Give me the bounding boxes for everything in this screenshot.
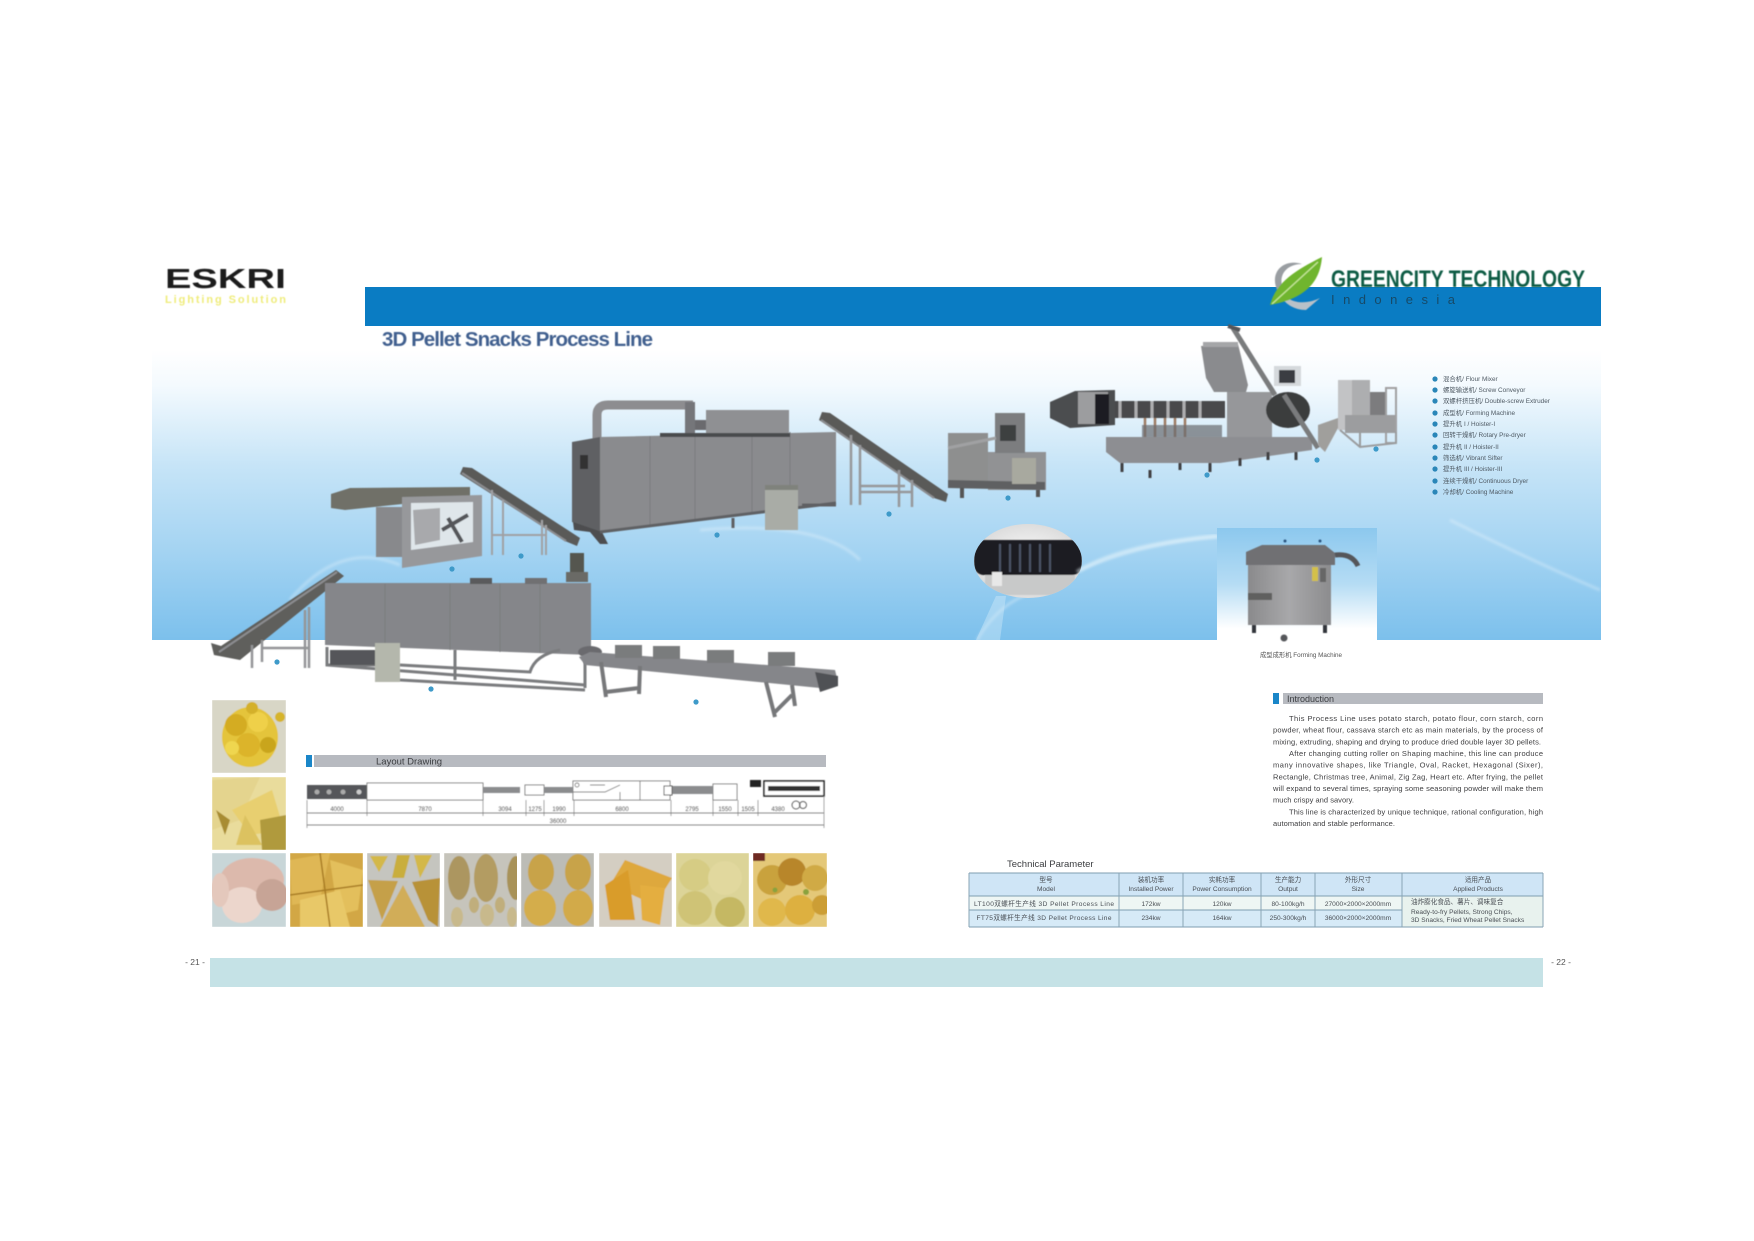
layout drawing: 7870 bbox=[418, 807, 432, 813]
logo: Greencity Technology bbox=[1270, 257, 1585, 310]
legend: machine list: 提升机 III / Hoister-III bbox=[1443, 464, 1503, 473]
photo: pale ridged snacks bbox=[676, 853, 749, 927]
legend: machine list: 螺旋输送机/ Screw Conveyor bbox=[1443, 385, 1526, 394]
table: technical parameters: 250-300kg/h bbox=[1270, 915, 1307, 922]
machine: large rotary pre-dryer bbox=[572, 402, 836, 544]
conveyor: hoister to pre-dryer bbox=[460, 467, 580, 555]
footer bar bbox=[210, 958, 1543, 987]
heading bar: layout drawing: Layout Drawing bbox=[376, 756, 442, 768]
header blue bar bbox=[365, 287, 1601, 326]
text block: introduction: This line is characterized by unique technique, rational configuration, high bbox=[1289, 807, 1543, 816]
table: technical parameters: 172kw bbox=[1141, 901, 1161, 908]
machine: continuous dryer bbox=[211, 553, 602, 690]
table: technical parameters: 36000×2000×2000mm bbox=[1325, 915, 1392, 922]
text block: introduction: powder, wheat flour, cassava starch etc as main materials, by the process of bbox=[1273, 726, 1544, 735]
machine: forming machine on line bbox=[948, 413, 1046, 498]
photo: round snacks bbox=[521, 853, 594, 927]
legend: machine list: 混合机/ Flour Mixer bbox=[1443, 374, 1499, 383]
legend: machine list: 回转干燥机/ Rotary Pre-dryer bbox=[1443, 430, 1527, 439]
table: technical parameters: 27000×2000×2000mm bbox=[1325, 901, 1392, 908]
table: technical parameters: 装机功率 bbox=[1138, 875, 1165, 884]
table: technical parameters: Applied Products bbox=[1453, 886, 1504, 893]
control box bbox=[375, 643, 400, 682]
machine: cooling conveyor bbox=[579, 645, 838, 717]
logo: Greencity Technology: Indonesia bbox=[1331, 292, 1456, 307]
text block: introduction: automation and stable performance. bbox=[1273, 819, 1395, 828]
text block: introduction: many innovative shapes, like Triangle, Oval, Racket, Hexagonal (Sixer), bbox=[1273, 761, 1543, 770]
extruder hopper bbox=[1201, 344, 1248, 392]
table: technical parameters: 164kw bbox=[1212, 915, 1232, 922]
table: technical parameters: 80-100kg/h bbox=[1272, 901, 1305, 908]
table: technical parameters: 3D Snacks, Fried Wheat Pellet Snacks bbox=[1411, 917, 1525, 924]
panel: sky blue gradient band bbox=[152, 350, 1601, 640]
table: technical parameters: FT75双螺杆生产线 3D Pellet Process Line bbox=[976, 913, 1112, 922]
legend: machine list: 提升机 II / Hoister-II bbox=[1443, 442, 1499, 451]
table: technical parameters: 适用产品 bbox=[1465, 875, 1492, 884]
photo: triangle snacks bbox=[367, 853, 440, 927]
table: technical parameters: Output bbox=[1278, 886, 1298, 893]
photo: ridged snacks bbox=[444, 853, 525, 927]
legend: machine list: 连续干燥机/ Continuous Dryer bbox=[1443, 476, 1529, 485]
table: technical parameters: LT100双螺杆生产线 3D Pellet Process Line bbox=[974, 899, 1114, 908]
text block: introduction: much crispy and savory. bbox=[1273, 796, 1354, 805]
text block: introduction: Rectangle, Christmas tree, Animal, Zig Zag, Heart etc. After frying, the pellet bbox=[1273, 772, 1544, 781]
layout drawing bbox=[307, 780, 824, 828]
photo: yellow curls bbox=[212, 700, 286, 773]
layout drawing: 6800 bbox=[615, 807, 629, 813]
table: technical parameters: Ready-to-fry Pellets, Strong Chips, bbox=[1411, 909, 1513, 916]
layout drawing: 1275 bbox=[528, 807, 542, 813]
layout drawing: 36000 bbox=[550, 819, 567, 825]
heading bar: layout drawing bbox=[306, 755, 826, 768]
panel: forming machine photo bbox=[1217, 528, 1377, 642]
machine: pre-dryer with hoister bbox=[331, 467, 580, 568]
legend: machine list: 双螺杆挤压机/ Double-screw Extruder bbox=[1443, 396, 1551, 405]
extruder gearbox bbox=[1227, 392, 1272, 437]
table: technical parameters: 实耗功率 bbox=[1209, 875, 1236, 884]
text block: introduction: After changing cutting roller on Shaping machine, this line can produce bbox=[1289, 749, 1543, 758]
machine: double-screw extruder bbox=[1050, 326, 1318, 478]
extruder die end bbox=[1050, 390, 1115, 428]
text block: introduction bbox=[1272, 714, 1544, 828]
table: technical parameters: Size bbox=[1352, 886, 1365, 893]
icon: leaf with swoosh bbox=[1270, 257, 1322, 310]
text block: introduction: will expand to several times, spraying some seasoning powder will make them bbox=[1272, 784, 1543, 793]
layout drawing: 4380 bbox=[771, 807, 785, 813]
machine: flour mixer bbox=[1318, 380, 1396, 452]
photo: cone snacks bbox=[599, 853, 672, 927]
photo: pink pellets bbox=[211, 853, 288, 927]
photo: yellow triangles bbox=[290, 853, 363, 927]
layout drawing: 4000 bbox=[330, 807, 344, 813]
table: technical parameters: 234kw bbox=[1141, 915, 1161, 922]
logo: Greencity Technology: GREENCITY TECHNOLOGY bbox=[1331, 266, 1585, 293]
page number right: - 22 - bbox=[1551, 957, 1571, 967]
table: technical parameters: 型号 bbox=[1039, 875, 1053, 884]
photo: plated snacks bbox=[753, 853, 832, 927]
conveyor: hoister to dryer bbox=[819, 412, 948, 507]
layout drawing: 1505 bbox=[741, 807, 755, 813]
legend: machine list: 冷却机/ Cooling Machine bbox=[1443, 487, 1514, 496]
page number left: - 21 - bbox=[185, 957, 205, 967]
layout drawing: 2795 bbox=[685, 807, 699, 813]
inclined screw conveyor bbox=[1233, 328, 1318, 448]
title: 3D Pellet Snacks Process Line bbox=[382, 328, 653, 351]
logo: ESKRI bbox=[165, 263, 286, 306]
table: technical parameters: Model bbox=[1037, 886, 1056, 893]
legend: machine list: 筛选机/ Vibrant Sifter bbox=[1443, 453, 1503, 462]
table: technical parameters: 120kw bbox=[1212, 901, 1232, 908]
legend: machine list: 成型机/ Forming Machine bbox=[1443, 408, 1516, 417]
machine number markers bbox=[274, 446, 1379, 705]
table: technical parameters: 外形尺寸 bbox=[1345, 875, 1372, 884]
legend: machine list bbox=[1432, 374, 1551, 496]
table: technical parameters: Installed Power bbox=[1128, 886, 1174, 893]
layout drawing: 1550 bbox=[718, 807, 732, 813]
table: technical parameters bbox=[969, 873, 1543, 927]
logo: ESKRI: Lighting Solution bbox=[165, 294, 286, 306]
legend: machine list: 提升机 I / Hoister-I bbox=[1443, 419, 1495, 428]
callout: roller detail bbox=[974, 524, 1217, 640]
logo: ESKRI: ESKRI bbox=[165, 263, 286, 294]
text block: introduction: mixing, extruding, shaping and drying to produce dried double layer 3D pellets. bbox=[1273, 737, 1541, 746]
photo: flat chips bbox=[212, 777, 286, 850]
heading bar: introduction: Introduction bbox=[1287, 694, 1334, 704]
extruder barrel bbox=[1115, 401, 1225, 418]
heading: technical parameter: Technical Parameter bbox=[1007, 859, 1094, 870]
table: technical parameters: Power Consumption bbox=[1192, 886, 1252, 893]
monitor bbox=[1274, 366, 1301, 386]
text block: introduction: This Process Line uses potato starch, potato flour, corn starch, corn bbox=[1289, 714, 1543, 723]
table: technical parameters: 油炸膨化食品、薯片、调味复合 bbox=[1411, 897, 1504, 906]
heading bar: introduction bbox=[1273, 693, 1543, 704]
layout drawing: 1990 bbox=[552, 807, 566, 813]
conveyor: inclined feed bbox=[211, 570, 344, 668]
table: technical parameters: 生产能力 bbox=[1275, 875, 1301, 884]
forming machine bbox=[1246, 540, 1358, 642]
layout drawing: 3094 bbox=[498, 807, 512, 813]
caption: forming machine: 成型成形机 Forming Machine bbox=[1260, 650, 1342, 659]
